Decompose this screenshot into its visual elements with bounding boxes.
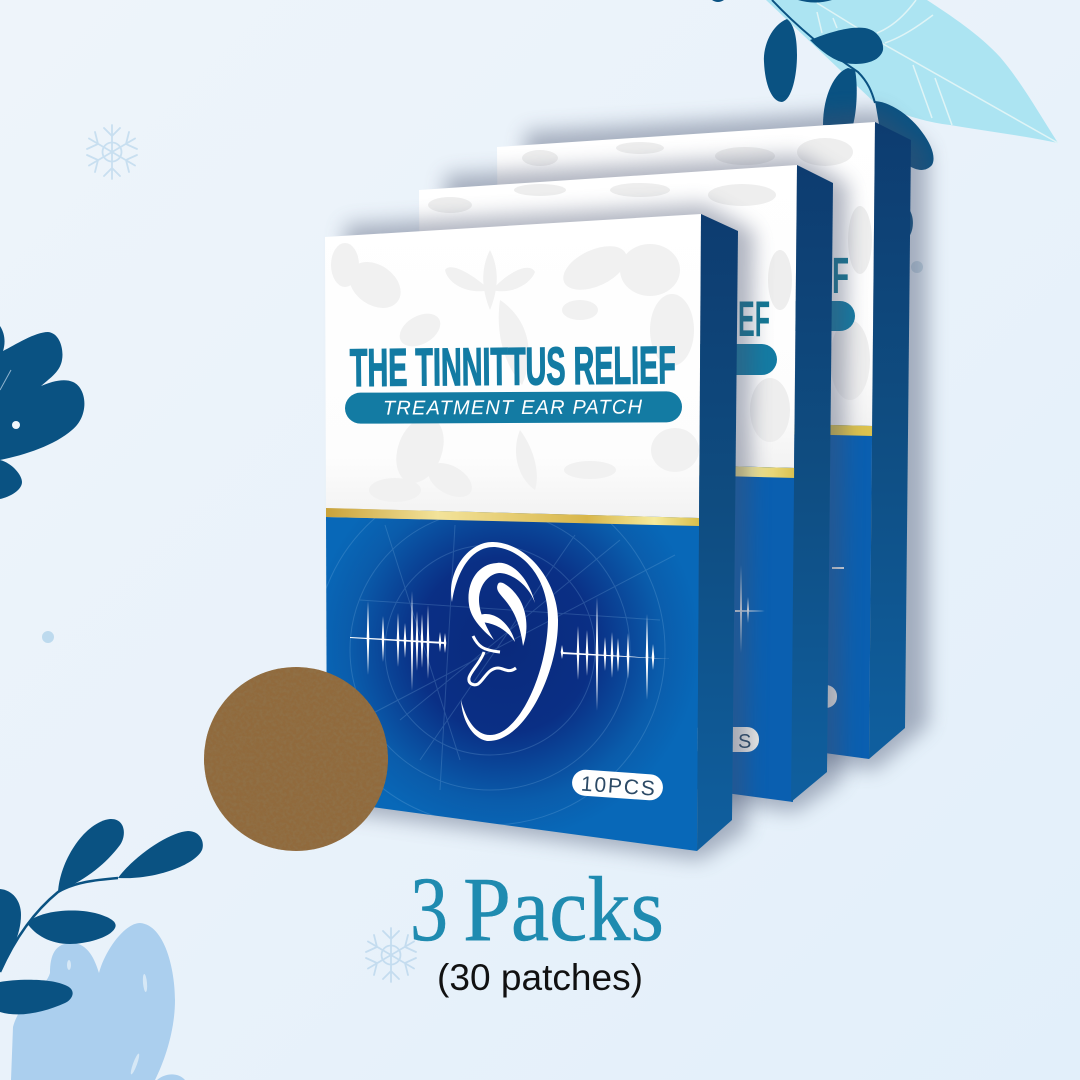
icon: pale blue plant bottom left xyxy=(11,923,185,1080)
icon: sound wave xyxy=(350,591,670,711)
icon: snowflake top left xyxy=(87,125,137,179)
radar rings xyxy=(326,518,675,825)
product box: front pack xyxy=(315,204,754,860)
patch sample xyxy=(204,667,388,851)
small dot left xyxy=(42,631,54,643)
icon: dark leaf cluster left edge xyxy=(0,326,84,499)
product box: middle pack: S xyxy=(738,731,751,753)
small dot right xyxy=(911,261,923,273)
subtitle pill: Treatment Ear Patch: TREATMENT EAR PATCH xyxy=(383,396,643,420)
icon: pale blue leaf top right xyxy=(766,0,1058,143)
side panel of front pack xyxy=(697,214,738,851)
caption: 30 patches: (30 patches) xyxy=(437,957,643,998)
gold band xyxy=(326,508,699,526)
product box: middle pack: EF xyxy=(738,291,770,347)
herbal line pattern xyxy=(331,243,699,481)
front face: blue ear panel xyxy=(326,517,699,851)
product box: back pack: F xyxy=(832,247,849,304)
icon: ear xyxy=(451,542,558,741)
icon: dark leaf sprig top right xyxy=(712,0,934,238)
product box: back pack xyxy=(497,110,928,770)
heading: 3 Packs: Packs xyxy=(463,858,664,960)
icon: snowflake near caption xyxy=(366,928,416,982)
front face: white herbal panel xyxy=(325,214,701,518)
title: The Tinnittus Relief: THE TINNITTUS RELIEF xyxy=(350,336,676,398)
heading: 3 Packs: 3 xyxy=(410,858,448,960)
icon: dark leaf sprig bottom left xyxy=(0,819,203,1014)
badge: 10PCS: 10PCS xyxy=(580,773,656,801)
subtitle pill: Treatment Ear Patch xyxy=(345,391,682,424)
product box: middle pack xyxy=(419,155,848,812)
